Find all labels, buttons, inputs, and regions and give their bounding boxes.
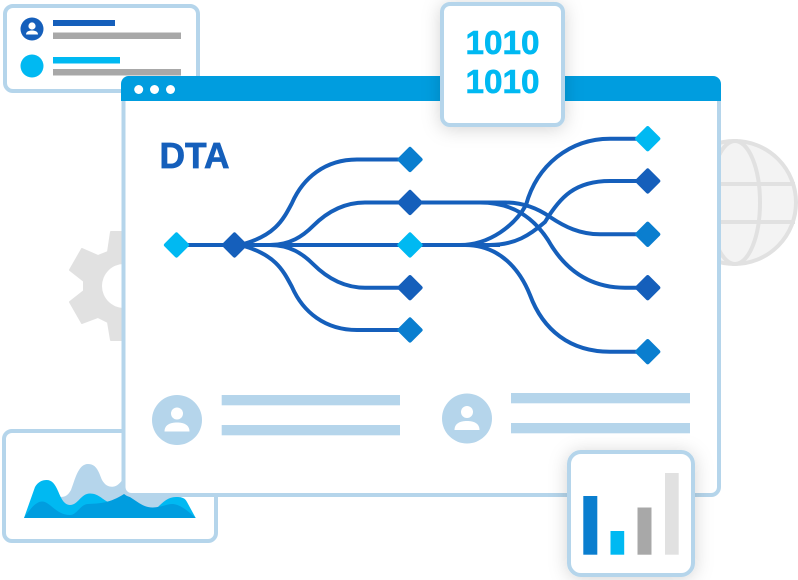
user row right	[442, 393, 690, 444]
contact row 2 bars	[53, 57, 181, 76]
panel: area chart card	[4, 431, 216, 541]
binary text	[466, 24, 540, 100]
window title bar	[121, 76, 721, 101]
icon: gear	[70, 232, 146, 340]
icon: cyan avatar	[20, 54, 44, 78]
panel: binary code card	[442, 4, 563, 125]
heading: DTA: DTA	[160, 135, 230, 176]
binary text: 1010	[466, 63, 540, 100]
flow connector lines	[176, 139, 647, 352]
panel: contact list card	[5, 6, 198, 91]
area chart	[24, 464, 196, 518]
binary text: 1010	[466, 24, 540, 61]
flow diagram	[166, 128, 658, 362]
icon: globe	[670, 141, 796, 264]
bar chart	[583, 473, 679, 555]
user row left	[152, 395, 400, 445]
panel: bar chart card	[569, 452, 693, 575]
contact row 1 bars	[53, 20, 181, 39]
flow nodes	[166, 128, 658, 362]
icon: user avatar dark	[20, 18, 44, 40]
panel: main browser window	[121, 76, 721, 495]
